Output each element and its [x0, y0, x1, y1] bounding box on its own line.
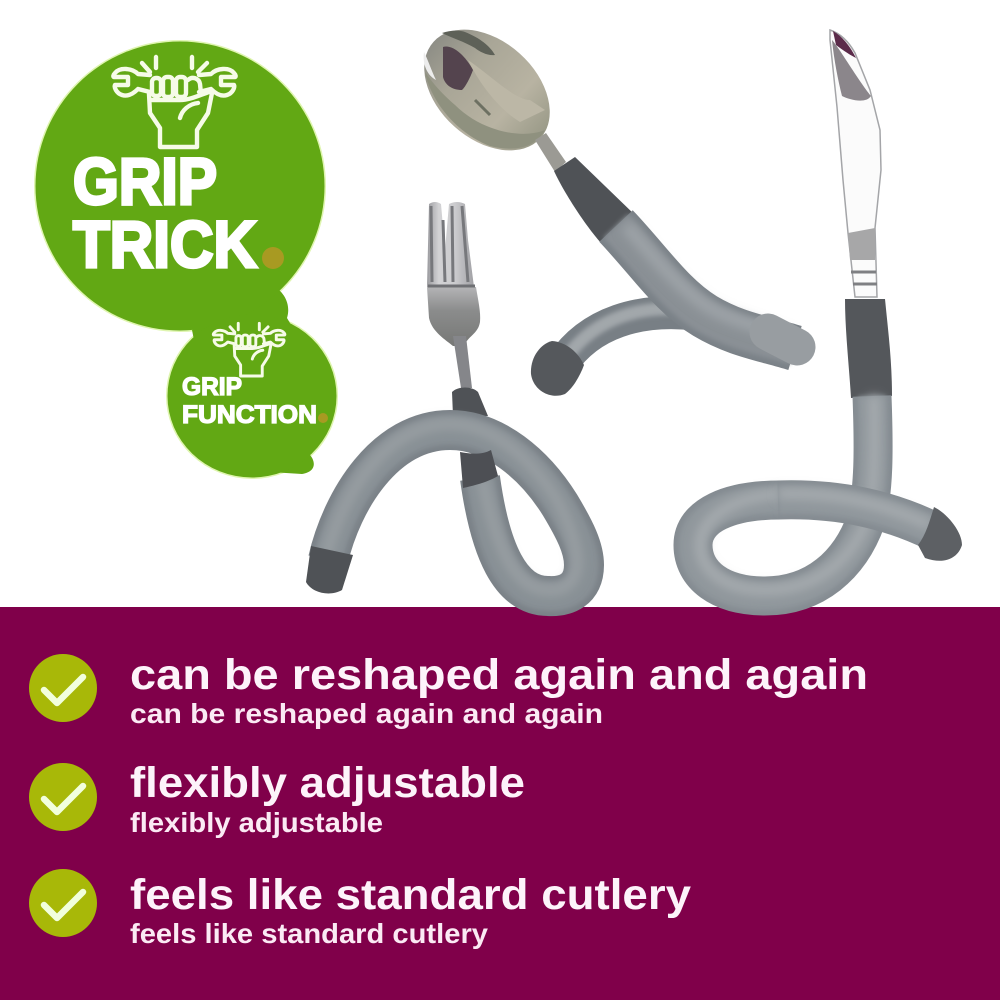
check icon 1 — [29, 654, 97, 722]
knife tube and loop — [693, 396, 874, 596]
knife dark collar — [845, 299, 892, 398]
small trademark dot — [318, 413, 328, 423]
benefit 3 — [29, 869, 691, 949]
knife dark tip — [918, 507, 962, 561]
fork neck — [453, 336, 472, 388]
badge: grip function — [168, 314, 336, 478]
heading 1: can be reshaped again and again — [130, 651, 868, 699]
spoon dark tip — [531, 341, 584, 396]
trademark dot — [262, 247, 284, 269]
icon: fist holding wrench — [113, 57, 236, 147]
heading 2: flexibly adjustable — [130, 759, 525, 807]
benefit 2 — [29, 759, 525, 838]
subtitle: grip: GRIP — [182, 373, 242, 401]
badge silhouette — [35, 41, 337, 478]
subtitle: function: FUNCTION — [182, 401, 317, 429]
subtext 2: flexibly adjustable — [130, 807, 383, 838]
badge: grip trick — [36, 42, 324, 330]
title: trick: TRICK — [73, 207, 257, 281]
fork head — [427, 202, 480, 346]
spoon dark collar — [554, 157, 636, 245]
illustration: bendable fork — [306, 202, 584, 596]
knife blade — [830, 30, 881, 297]
fork dark tip — [306, 546, 353, 593]
fork tube — [326, 424, 584, 596]
spoon neck — [535, 133, 566, 172]
spoon far tube — [562, 309, 695, 364]
check icon 3 — [29, 869, 97, 937]
spoon near tube — [616, 226, 795, 348]
benefit 1 — [29, 651, 868, 729]
title: grip: GRIP — [73, 144, 217, 218]
heading 3: feels like standard cutlery — [130, 871, 691, 919]
fork dark collar — [452, 388, 488, 416]
benefit list — [29, 651, 868, 949]
subtext 3: feels like standard cutlery — [130, 918, 488, 949]
spoon bowl — [401, 5, 573, 175]
illustration: bendable spoon — [401, 5, 797, 396]
icon: small fist holding wrench — [213, 323, 285, 376]
subtext 1: can be reshaped again and again — [130, 698, 603, 729]
spoon handle light end — [768, 332, 797, 347]
knife crossing tube — [778, 494, 935, 532]
logo badges — [35, 41, 337, 478]
check icon 2 — [29, 763, 97, 831]
illustration: bendable knife — [693, 30, 962, 596]
bottom panel — [0, 607, 1000, 1000]
fork dark band — [460, 450, 498, 488]
